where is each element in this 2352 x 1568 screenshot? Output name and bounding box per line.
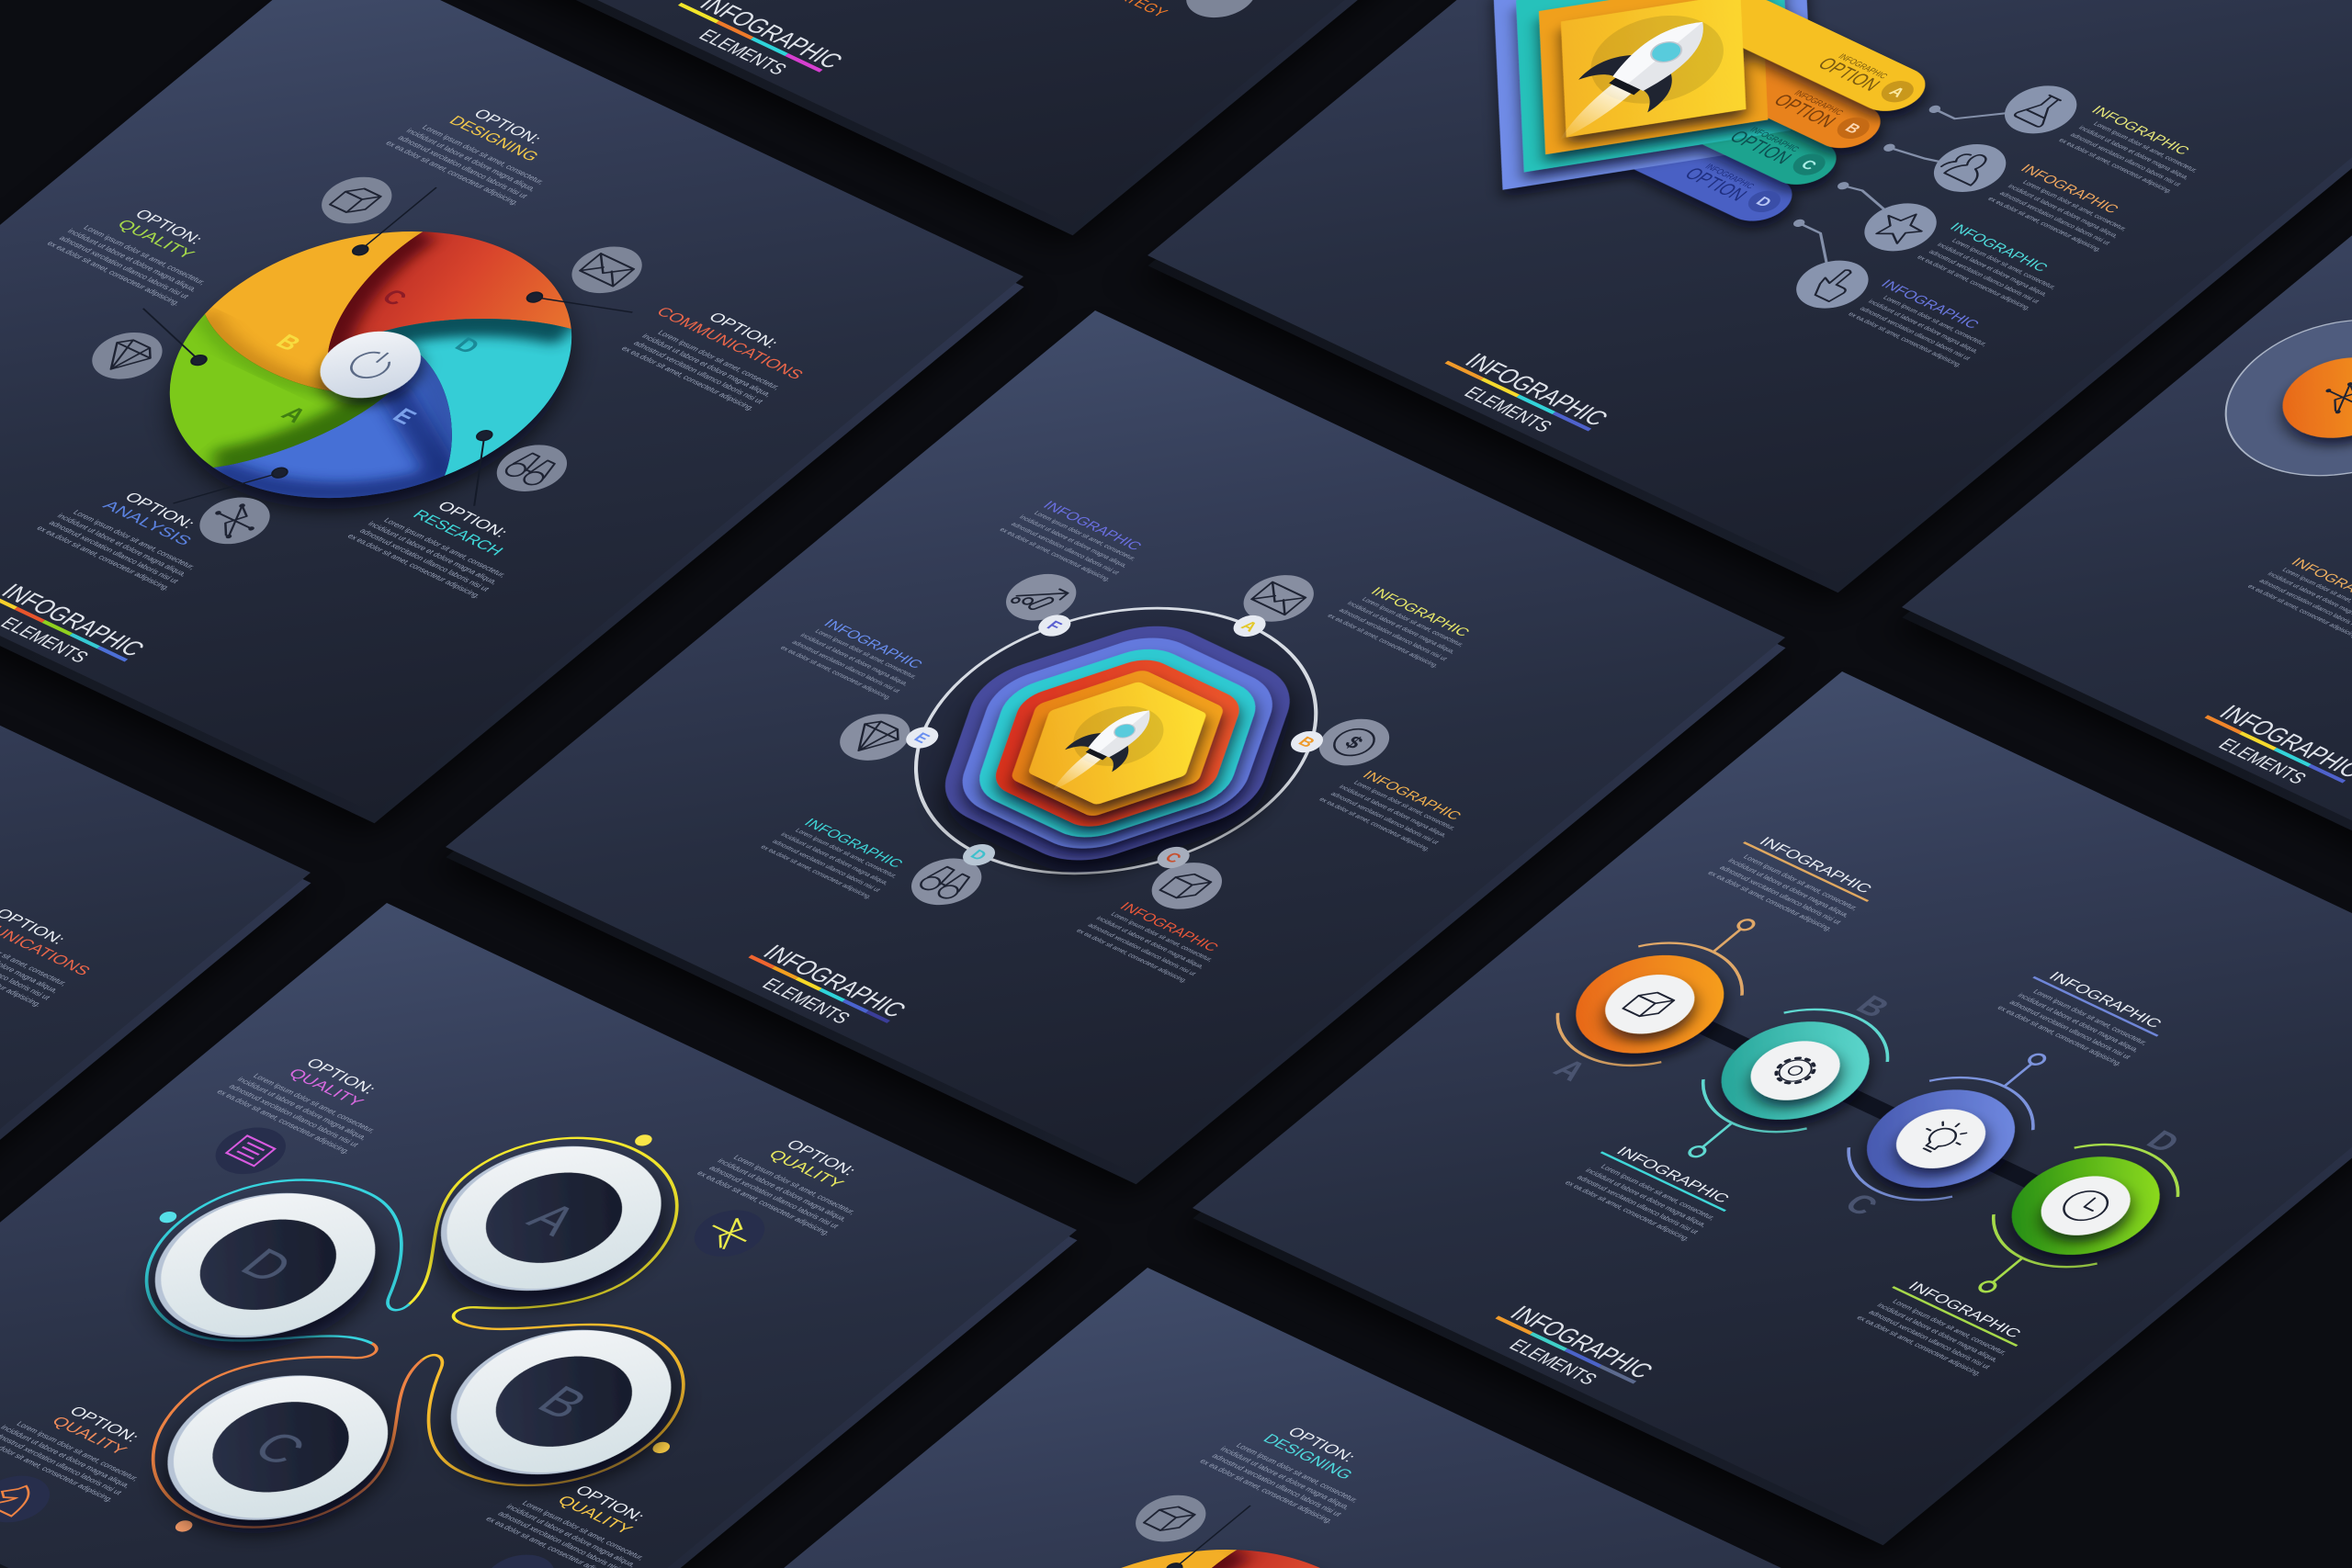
text block B — [1317, 764, 1470, 852]
icon: analysis — [186, 489, 284, 553]
ring A — [396, 1119, 706, 1318]
icon: analysis yellow — [680, 1201, 779, 1266]
icon: document — [201, 1119, 300, 1183]
text block: option C — [1913, 221, 2071, 311]
tab labels C — [1724, 122, 1832, 181]
step A orange: A — [1545, 1054, 1595, 1087]
text block A: INFOGRAPHIC — [1367, 585, 1473, 639]
orbit ring — [833, 558, 1398, 923]
text block C: incididunt ut labore et dolore magna aliqua, — [2016, 992, 2141, 1054]
outer ring — [2177, 290, 2352, 504]
text block: infographic — [2245, 552, 2352, 639]
text block: top quality: incididunt ut labore et dolore magna aliqua, — [235, 1076, 369, 1142]
text block: communications: COMMUNICATIONS — [652, 304, 808, 382]
text block: research: RESEARCH — [409, 507, 507, 558]
text block: quality: Lorem ipsum dolor sit amet, consectetur, — [82, 223, 208, 286]
text block A: ex ea.dolor sit amet, consectetur adipisicing. — [1326, 614, 1440, 669]
icon: binoculars — [482, 436, 582, 500]
text block B: adnostrud xercitation ullamco laboris nisi ut — [1575, 1174, 1701, 1235]
text block C — [1995, 965, 2172, 1068]
text block: bottom right quality: incididunt ut labore et dolore magna aliqua, — [504, 1503, 639, 1568]
ring D: D — [229, 1240, 304, 1292]
tab labels A: INFOGRAPHIC — [1836, 52, 1889, 81]
text block E: ex ea.dolor sit amet, consectetur adipisicing. — [778, 645, 892, 701]
text block: option D: INFOGRAPHIC — [1877, 277, 1982, 332]
text block: quality: ex ea.dolor sit amet, consectetur adipisicing. — [45, 239, 183, 307]
ring D — [110, 1166, 420, 1365]
badge C with cube icon — [1121, 843, 1240, 918]
text block: analysis: ex ea.dolor sit amet, consectetur adipisicing. — [35, 524, 173, 592]
step C blue: C — [1837, 1188, 1885, 1222]
panel: right fragment — [1883, 71, 2352, 957]
text block: option C: INFOGRAPHIC — [1946, 221, 2051, 275]
ring B: B — [526, 1378, 599, 1428]
footer title: ELEMENTS — [1504, 1337, 1601, 1388]
badge D with binoculars icon: D — [967, 846, 991, 863]
text block D: ex ea.dolor sit amet, consectetur adipisicing. — [1855, 1314, 1984, 1377]
text block B — [1562, 1140, 1740, 1243]
footer title: INFOGRAPHIC — [1504, 1301, 1659, 1382]
ring C: C — [242, 1423, 317, 1474]
panel: rocket options — [1128, 0, 2352, 605]
badge B with dollar icon — [1284, 703, 1404, 777]
text block: option D: ex ea.dolor sit amet, consectetur adipisicing. — [1847, 311, 1963, 368]
layer C: teal arrow tab — [1386, 0, 1976, 264]
panel: bottom left rings — [0, 903, 1091, 1568]
text block A: adnostrud xercitation ullamco laboris nisi ut — [1718, 864, 1844, 926]
pie chart: swirl segments — [86, 177, 660, 547]
text block: designing: OPTION: — [1283, 1424, 1360, 1465]
text block C: Lorem ipsum dolor sit amet, consectetur, — [1109, 911, 1214, 963]
layer D: blue arrow tab — [1342, 0, 1998, 282]
tab labels A: OPTION — [1813, 53, 1885, 95]
icon: mail — [558, 238, 657, 302]
text block A: ex ea.dolor sit amet, consectetur adipisicing. — [1706, 869, 1835, 932]
badge F with chart icon: F — [1043, 617, 1067, 634]
step B teal: B — [1849, 990, 1897, 1023]
text block C: incididunt ut labore et dolore magna aliqua, — [1094, 916, 1205, 970]
text block: research: OPTION: — [434, 498, 512, 540]
text block D: Lorem ipsum dolor sit amet, consectetur, — [1891, 1298, 2008, 1357]
text block: quality: OPTION: — [131, 207, 207, 247]
text block: designing: ex ea.dolor sit amet, consectetur adipisicing. — [384, 139, 522, 207]
ring B — [406, 1303, 716, 1502]
text block D: incididunt ut labore et dolore magna aliqua, — [779, 832, 889, 886]
text block: analysis — [35, 474, 233, 592]
ring C — [122, 1348, 432, 1547]
text block F: adnostrud xercitation ullamco laboris nisi ut — [1010, 522, 1120, 576]
footer title — [1423, 343, 1614, 449]
text block: bottom right quality: OPTION: — [571, 1483, 649, 1524]
text block: bottom right quality: Lorem ipsum dolor sit amet, consectetur, — [520, 1499, 647, 1562]
text block: option B: adnostrud xercitation ullamco laboris nisi ut — [1997, 190, 2111, 246]
text block F: ex ea.dolor sit amet, consectetur adipisicing. — [998, 527, 1112, 583]
icon: hand — [1781, 252, 1883, 317]
tab labels D: OPTION — [1679, 164, 1752, 205]
icon: knight — [0, 1467, 64, 1531]
text block: designing: DESIGNING — [446, 113, 543, 164]
panel: center hexagon rocket — [426, 310, 1799, 1197]
text block: option A: adnostrud xercitation ullamco laboris nisi ut — [2068, 131, 2182, 187]
text block A: incididunt ut labore et dolore magna aliqua, — [1726, 857, 1851, 919]
text block: top quality: Lorem ipsum dolor sit amet, consectetur, — [252, 1072, 378, 1134]
text block: designing — [384, 90, 581, 207]
text block A: incididunt ut labore et dolore magna aliqua, — [1346, 601, 1456, 655]
text block E: Lorem ipsum dolor sit amet, consectetur, — [813, 628, 918, 680]
pie segment letters: E — [387, 403, 423, 429]
text block: option C: ex ea.dolor sit amet, consectetur adipisicing. — [1916, 254, 2032, 311]
text block: option B: Lorem ipsum dolor sit amet, consectetur, — [2021, 179, 2129, 232]
text block: designing: adnostrud xercitation ullamco laboris nisi ut — [1210, 1451, 1344, 1518]
rocket icon — [1511, 0, 1751, 163]
text block B: incididunt ut labore et dolore magna aliqua, — [1338, 784, 1448, 839]
text block: analysis: ANALYSIS — [99, 498, 196, 548]
text block D: INFOGRAPHIC — [1905, 1280, 2024, 1340]
text block C: INFOGRAPHIC — [1116, 900, 1221, 954]
text block F: Lorem ipsum dolor sit amet, consectetur, — [1033, 511, 1136, 562]
step D green — [1928, 1104, 2232, 1316]
text block: bottom left quality: QUALITY — [48, 1414, 131, 1458]
text block: option A: ex ea.dolor sit amet, consectetur adipisicing. — [2057, 137, 2174, 195]
text block C: adnostrud xercitation ullamco laboris nisi ut — [1086, 922, 1197, 977]
tab labels C: OPTION — [1724, 127, 1797, 167]
pie segment letters: D — [449, 333, 486, 358]
text block E: INFOGRAPHIC — [820, 617, 925, 671]
text block: research — [345, 482, 544, 600]
footer title: ELEMENTS — [1459, 384, 1556, 435]
tab labels A: A — [1885, 84, 1909, 100]
footer title: INFOGRAPHIC — [1459, 348, 1614, 430]
orange disc — [2257, 343, 2352, 453]
pie segment letters: C — [376, 285, 413, 310]
badge B with dollar icon: B — [1295, 733, 1319, 750]
text block D: adnostrud xercitation ullamco laboris nisi ut — [1867, 1309, 1993, 1371]
text block: option B — [1984, 163, 2142, 254]
text block: analysis: incididunt ut labore et dolore magna aliqua, — [55, 512, 189, 578]
text block: quality: adnostrud xercitation ullamco laboris nisi ut — [57, 234, 192, 300]
text block D — [1854, 1275, 2031, 1378]
footer title — [727, 937, 912, 1041]
connector dots — [1790, 104, 1944, 228]
text block: analysis: adnostrud xercitation ullamco laboris nisi ut — [47, 519, 181, 585]
nested hexagon layers — [985, 660, 1250, 828]
text block: designing: Lorem ipsum dolor sit amet, consectetur, — [420, 123, 547, 186]
text block E: incididunt ut labore et dolore magna aliqua, — [798, 633, 910, 687]
text block A: Lorem ipsum dolor sit amet, consectetur, — [1742, 853, 1860, 911]
text block: bottom left quality: Lorem ipsum dolor sit amet, consectetur, — [15, 1420, 141, 1483]
icon: flask — [1990, 77, 2092, 142]
text block: communications: ex ea.dolor sit amet, consectetur adipisicing. — [619, 344, 757, 412]
footer title: ELEMENTS — [694, 27, 791, 78]
badge C with cube icon: C — [1161, 849, 1186, 866]
text block: bottom left quality: OPTION: — [65, 1404, 143, 1445]
text block: communications: Lorem ipsum dolor sit amet, consectetur, — [656, 329, 783, 391]
text block: communications — [614, 291, 822, 414]
text block: option D: adnostrud xercitation ullamco laboris nisi ut — [1858, 306, 1972, 362]
text block: designing: DESIGNING — [1260, 1431, 1357, 1483]
footer title: ELEMENTS — [2213, 736, 2311, 787]
text block: option A — [2055, 104, 2212, 195]
text block: designing: adnostrud xercitation ullamco laboris nisi ut — [396, 133, 530, 200]
text block: right quality: incididunt ut labore et dolore magna aliqua, — [716, 1156, 850, 1223]
text block: right quality: QUALITY — [764, 1147, 848, 1191]
text block: option D: Lorem ipsum dolor sit amet, consectetur, — [1882, 295, 1989, 347]
step C blue — [1792, 1030, 2096, 1242]
text block: top quality: QUALITY — [285, 1066, 368, 1110]
text block: quality: QUALITY — [113, 217, 198, 262]
text block A: INFOGRAPHIC — [1756, 835, 1875, 896]
text block: communications: adnostrud xercitation ullamco laboris nisi ut — [631, 339, 766, 405]
text block B: ex ea.dolor sit amet, consectetur adipisicing. — [1317, 796, 1431, 852]
pie segment letters: A — [276, 401, 312, 427]
tab labels C: INFOGRAPHIC — [1747, 126, 1801, 153]
clover outline — [0, 1018, 903, 1568]
panel: bottom right timeline — [1173, 671, 2352, 1558]
text block: top quality: ex ea.dolor sit amet, consectetur adipisicing. — [215, 1088, 353, 1156]
text block C: INFOGRAPHIC — [2045, 970, 2165, 1031]
text block: bottom right quality — [484, 1466, 681, 1568]
tab labels B: OPTION — [1769, 90, 1841, 131]
text block: right quality: adnostrud xercitation ullamco laboris nisi ut — [707, 1164, 842, 1230]
text block: research: adnostrud xercitation ullamco laboris nisi ut — [357, 526, 492, 593]
icon: cube — [307, 168, 406, 232]
text block A: adnostrud xercitation ullamco laboris nisi ut — [1337, 608, 1448, 662]
layer A: yellow arrow tab — [1474, 0, 1939, 229]
text block A — [1326, 581, 1478, 669]
text block: designing: Lorem ipsum dolor sit amet, consectetur, — [1234, 1441, 1361, 1504]
text block: bottom left quality: incididunt ut labore et dolore magna aliqua, — [0, 1423, 132, 1489]
text block: top quality: adnostrud xercitation ullamco laboris nisi ut — [227, 1082, 361, 1148]
text block: right quality — [695, 1120, 892, 1237]
text block: designing: ex ea.dolor sit amet, consectetur adipisicing. — [1198, 1457, 1336, 1525]
text block F — [998, 495, 1150, 583]
text block: communications: OPTION: — [705, 310, 782, 351]
panel: bottom center pie fragment — [479, 1268, 1851, 1568]
tab labels C: C — [1797, 157, 1820, 173]
text block B: ex ea.dolor sit amet, consectetur adipisicing. — [1563, 1179, 1691, 1242]
text block C: ex ea.dolor sit amet, consectetur adipisicing. — [1996, 1004, 2124, 1067]
footer title: INFOGRAPHIC — [757, 940, 912, 1021]
text block: bottom left quality — [0, 1387, 175, 1504]
connecting bar — [1645, 996, 2092, 1213]
tab labels D: D — [1752, 194, 1776, 210]
tab labels D: INFOGRAPHIC — [1702, 163, 1757, 191]
text block B: Lorem ipsum dolor sit amet, consectetur, — [1351, 780, 1456, 831]
text block: option communications — [0, 887, 109, 1010]
text block: option D: incididunt ut labore et dolore magna aliqua, — [1867, 299, 1980, 355]
text block: top quality — [215, 1039, 413, 1156]
tab labels B: B — [1841, 120, 1865, 137]
text block A: Lorem ipsum dolor sit amet, consectetur, — [1360, 597, 1464, 649]
tab labels B — [1769, 85, 1876, 145]
panel: top center fragment — [363, 0, 1736, 248]
footer title — [1474, 1298, 1659, 1402]
panel: pie chart — [0, 0, 1037, 836]
pie chart fragment — [900, 1495, 1474, 1568]
step A orange — [1502, 895, 1805, 1108]
badge E with diamond icon — [825, 702, 945, 777]
text block: designing: OPTION: — [469, 106, 546, 147]
text block: right quality: Lorem ipsum dolor sit amet, consectetur, — [731, 1154, 858, 1216]
icon: partial circle — [1171, 0, 1271, 27]
text block D — [759, 812, 911, 900]
text block D: adnostrud xercitation ullamco laboris nisi ut — [771, 839, 881, 893]
layer B: orange arrow tab — [1431, 0, 1955, 246]
text block F: incididunt ut labore et dolore magna aliqua, — [1018, 514, 1128, 569]
text block: designing — [1198, 1408, 1395, 1525]
panel: left fragment — [0, 546, 324, 1432]
tab labels D — [1679, 159, 1787, 219]
text block: bottom right quality: QUALITY — [553, 1493, 637, 1537]
icon: people — [1919, 135, 2021, 201]
ring A: A — [516, 1194, 590, 1245]
leader lines and dots — [5, 143, 706, 595]
text block: top quality: OPTION: — [302, 1055, 380, 1097]
text block E: adnostrud xercitation ullamco laboris nisi ut — [790, 639, 901, 694]
text block D: incididunt ut labore et dolore magna aliqua, — [1875, 1302, 2000, 1363]
text block D: INFOGRAPHIC — [800, 817, 906, 871]
icon: diamond — [77, 323, 176, 388]
text block: right quality: OPTION: — [783, 1136, 860, 1179]
text block: quality — [45, 190, 243, 308]
text block: option C: Lorem ipsum dolor sit amet, consectetur, — [1951, 238, 2058, 290]
text block: designing: incididunt ut labore et dolore magna aliqua, — [404, 127, 538, 193]
footer title: ELEMENTS — [757, 976, 854, 1027]
icon: cube — [1121, 1486, 1220, 1551]
text block F: INFOGRAPHIC — [1039, 500, 1145, 553]
text block: communications: incididunt ut labore et dolore magna aliqua, — [640, 332, 774, 398]
text block D: ex ea.dolor sit amet, consectetur adipisicing. — [759, 844, 873, 900]
step B teal — [1638, 969, 1941, 1181]
step D green: D — [2139, 1125, 2188, 1158]
text block D: Lorem ipsum dolor sit amet, consectetur, — [794, 828, 899, 879]
text block: option A: incididunt ut labore et dolore magna aliqua, — [2077, 125, 2191, 181]
connector lines — [1777, 89, 2008, 263]
text block: analysis: OPTION: — [120, 490, 199, 531]
badge A with mail icon: A — [1237, 617, 1262, 635]
text block: option A: Lorem ipsum dolor sit amet, consectetur, — [2092, 120, 2199, 174]
text block: option C: incididunt ut labore et dolore magna aliqua, — [1935, 242, 2049, 298]
badge E with diamond icon: E — [910, 729, 934, 746]
text block C: Lorem ipsum dolor sit amet, consectetur, — [2031, 988, 2150, 1046]
text block: option B: incididunt ut labore et dolore magna aliqua, — [2007, 183, 2120, 239]
tab labels A — [1813, 49, 1920, 108]
leader line — [1164, 1503, 1256, 1568]
text block C: adnostrud xercitation ullamco laboris nisi ut — [2007, 998, 2133, 1061]
text block A — [1705, 830, 1883, 933]
text block: option D — [1844, 277, 2002, 368]
pie segment letters — [217, 269, 511, 461]
badge D with binoculars icon — [897, 834, 1015, 914]
icon: bottom circle — [470, 1546, 569, 1568]
text block: right quality: ex ea.dolor sit amet, consectetur adipisicing. — [695, 1169, 832, 1236]
badge B with dollar icon: $ — [1340, 732, 1369, 752]
badge A with mail icon — [1210, 567, 1329, 646]
icon: star — [1849, 195, 1951, 260]
badge F with chart icon — [988, 565, 1107, 640]
footer title — [657, 0, 849, 92]
text block B: INFOGRAPHIC — [1612, 1145, 1732, 1206]
text block B: adnostrud xercitation ullamco laboris nisi ut — [1329, 791, 1440, 845]
text block: option B: INFOGRAPHIC — [2017, 163, 2121, 216]
text block C — [1075, 896, 1227, 984]
text block: research: incididunt ut labore et dolore magna aliqua, — [366, 520, 500, 586]
text block B: Lorem ipsum dolor sit amet, consectetur, — [1599, 1163, 1717, 1222]
text block E — [778, 613, 932, 701]
text block: quality: incididunt ut labore et dolore magna aliqua, — [65, 227, 199, 293]
text block: research: Lorem ipsum dolor sit amet, consectetur, — [382, 516, 508, 579]
pie segment letters: B — [270, 330, 307, 355]
text block C: ex ea.dolor sit amet, consectetur adipisicing. — [1075, 928, 1188, 984]
footer title: INFOGRAPHIC — [0, 579, 151, 660]
text block: option C: adnostrud xercitation ullamco laboris nisi ut — [1927, 249, 2041, 305]
text block B: INFOGRAPHIC — [1359, 769, 1464, 823]
tab labels B: INFOGRAPHIC — [1792, 89, 1845, 118]
text block B: incididunt ut labore et dolore magna aliqua, — [1584, 1167, 1709, 1228]
text block: designing: incididunt ut labore et dolore magna aliqua, — [1218, 1445, 1352, 1511]
text block: option A: INFOGRAPHIC — [2087, 104, 2192, 158]
text block: research: ex ea.dolor sit amet, consectetur adipisicing. — [345, 532, 483, 600]
text block: option B: ex ea.dolor sit amet, consectetur adipisicing. — [1986, 196, 2103, 254]
text block: analysis: Lorem ipsum dolor sit amet, consectetur, — [72, 508, 198, 570]
rocket icon — [1019, 695, 1182, 807]
